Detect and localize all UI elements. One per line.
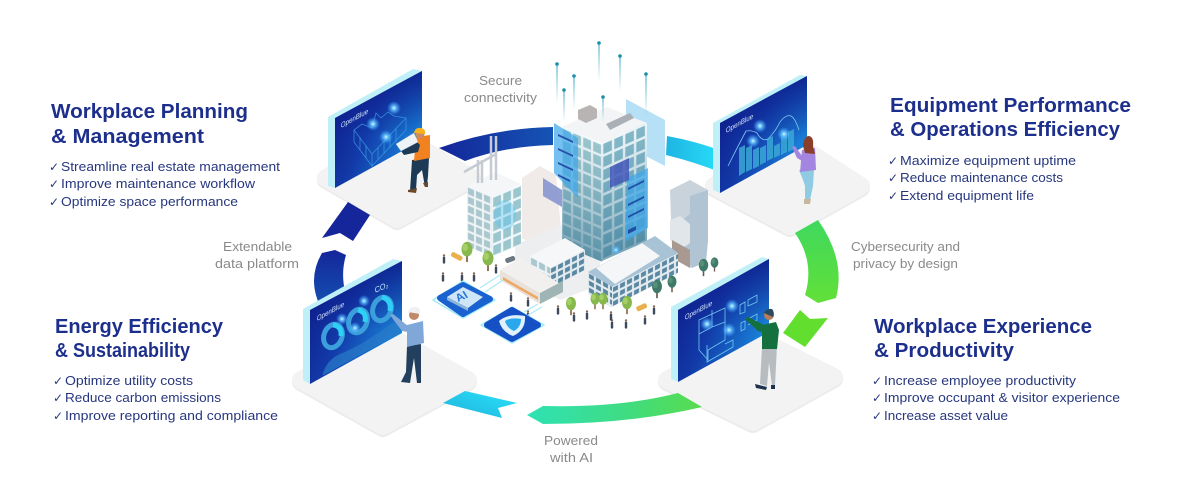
screen highlights xyxy=(746,119,791,148)
orange stripes xyxy=(503,277,538,300)
left face xyxy=(467,186,492,256)
donut charts xyxy=(320,295,395,350)
screen back glow xyxy=(713,75,807,193)
roof xyxy=(562,107,647,143)
label: extendable data platform: data platform xyxy=(215,256,299,271)
hard hat xyxy=(414,128,425,134)
bar chart xyxy=(739,129,794,176)
hair xyxy=(764,309,774,317)
right low glass building xyxy=(588,236,678,307)
legs xyxy=(799,170,814,200)
floating glass panel behind tower xyxy=(626,99,665,166)
platform: workplace experience xyxy=(667,335,834,424)
cars xyxy=(450,251,648,312)
pale background building xyxy=(522,166,562,250)
roof xyxy=(500,258,560,293)
tower light blocks xyxy=(670,216,690,250)
floor plan xyxy=(699,308,733,362)
roof unit xyxy=(578,105,597,123)
base glow xyxy=(611,245,621,255)
roof xyxy=(467,172,521,197)
text block: workplace planning xyxy=(49,101,280,209)
label: secure connectivity: Secure xyxy=(479,73,522,88)
left glass building xyxy=(464,136,521,257)
side block xyxy=(540,281,563,304)
screen xyxy=(335,71,422,188)
connector lines to chips xyxy=(480,275,542,315)
benefits list: Improve occupant & visitor experience xyxy=(884,390,1120,405)
trousers xyxy=(760,346,777,386)
icon: AI chip xyxy=(433,281,495,318)
benefits list: Optimize utility costs xyxy=(65,373,194,388)
ring arrow: green right arc xyxy=(795,220,839,303)
benefits list: Extend equipment life xyxy=(900,188,1034,203)
benefits list: Increase employee productivity xyxy=(884,373,1077,388)
label: cybersecurity and privacy by design xyxy=(851,239,960,271)
trees xyxy=(462,242,718,315)
shirt xyxy=(407,321,424,347)
roof light xyxy=(596,243,660,284)
text block: workplace experience xyxy=(872,316,1120,423)
person: man in green sweater xyxy=(745,309,779,390)
benefits list xyxy=(53,373,278,423)
benefits list: Reduce carbon emissions xyxy=(65,390,222,405)
benefits list xyxy=(49,159,280,209)
antennas xyxy=(556,43,646,122)
tower shade xyxy=(676,190,708,268)
illustration: central smart building campus xyxy=(433,41,718,343)
benefits list: ✓ xyxy=(888,189,898,203)
benefits list: Increase asset value xyxy=(884,408,1008,423)
facade xyxy=(500,270,540,304)
ring arrow: navy top segment xyxy=(439,127,553,161)
screen back glow xyxy=(303,259,402,384)
benefits list: ✓ xyxy=(872,391,882,405)
heading: & Management xyxy=(51,126,204,148)
heading: Equipment Performance xyxy=(890,95,1131,117)
benefits list: ✓ xyxy=(49,160,59,174)
arm xyxy=(390,314,408,332)
benefits list: Improve maintenance workflow xyxy=(61,176,256,191)
ring arrow: cyan bottom head xyxy=(443,391,517,418)
left face xyxy=(562,127,602,262)
label: cybersecurity and privacy by design: privacy by design xyxy=(853,256,958,271)
heading xyxy=(51,101,248,148)
shoes xyxy=(804,199,811,204)
benefits list: ✓ xyxy=(53,374,63,388)
heading xyxy=(874,316,1092,362)
tower block grey xyxy=(670,180,708,268)
screen dark overlay xyxy=(678,259,769,382)
boots xyxy=(408,182,428,193)
panel: energy efficiency screen and person xyxy=(303,259,424,384)
benefits list: Optimize space performance xyxy=(61,194,238,209)
people on plaza xyxy=(442,254,655,329)
benefits list: ✓ xyxy=(888,171,898,185)
benefits list xyxy=(872,373,1120,423)
heading: Workplace Planning xyxy=(51,101,248,123)
screen logo: OpenBlue xyxy=(685,300,713,322)
antenna nodes xyxy=(555,41,648,99)
benefits list: ✓ xyxy=(53,409,63,423)
orange vest xyxy=(414,135,430,161)
text block: equipment performance xyxy=(888,95,1131,203)
benefits list: ✓ xyxy=(53,391,63,405)
platform: energy efficiency xyxy=(301,334,468,428)
panel: equipment performance screen and person xyxy=(713,75,816,204)
person: man in cap xyxy=(390,307,424,383)
heading: & Sustainability xyxy=(55,340,191,362)
left overlay bars xyxy=(558,134,573,182)
screen back glow xyxy=(671,257,769,382)
right facade xyxy=(612,253,678,307)
icon: security shield chip xyxy=(481,307,544,343)
pale ground block between buildings xyxy=(515,225,600,300)
chip body xyxy=(447,287,483,308)
legs xyxy=(401,344,421,383)
label: cybersecurity and privacy by design: Cybersecurity and xyxy=(851,239,960,254)
right face xyxy=(492,185,521,257)
purple data panel xyxy=(610,158,629,188)
roof vent xyxy=(606,113,634,130)
shoes xyxy=(755,384,775,390)
label: extendable data platform: Extendable xyxy=(223,239,292,254)
chart marks xyxy=(740,295,757,331)
heading xyxy=(890,95,1131,141)
screen back glow xyxy=(328,69,422,188)
benefits list: ✓ xyxy=(872,374,882,388)
middle white building xyxy=(530,238,585,288)
person: engineer with plans xyxy=(396,128,430,193)
world map shape xyxy=(322,318,400,377)
shield xyxy=(499,315,525,336)
arm xyxy=(792,146,802,161)
panel: workplace planning screen and person xyxy=(328,69,430,193)
heading: Energy Efficiency xyxy=(55,316,224,338)
screen highlights xyxy=(700,299,739,337)
label: secure connectivity xyxy=(464,73,538,105)
sweater xyxy=(762,322,779,349)
screen highlights xyxy=(336,295,370,334)
low white building with orange awning xyxy=(500,258,563,304)
platform: workplace planning xyxy=(326,137,472,221)
screen logo: OpenBlue xyxy=(341,108,369,130)
line chart xyxy=(728,116,799,166)
outer outline xyxy=(481,307,544,343)
chip label: AI xyxy=(453,290,470,304)
roof xyxy=(530,238,585,268)
head xyxy=(416,130,424,138)
benefits list: ✓ xyxy=(49,195,59,209)
ring arrow: green arrow head xyxy=(783,310,828,347)
co2 label: CO₂ xyxy=(374,280,389,295)
person: woman at screen xyxy=(792,136,816,204)
roof outer xyxy=(588,236,678,287)
screen dark overlay xyxy=(335,71,422,188)
right data overlay xyxy=(625,168,648,242)
heading: & Productivity xyxy=(874,340,1015,362)
benefits list: ✓ xyxy=(49,177,59,191)
crane xyxy=(464,136,496,183)
left data overlay xyxy=(554,123,578,198)
label: extendable data platform xyxy=(215,239,299,271)
screen logo: OpenBlue xyxy=(726,113,754,135)
benefits list xyxy=(888,153,1076,203)
benefits list: ✓ xyxy=(872,409,882,423)
benefits list: ✓ xyxy=(888,154,898,168)
tower brown base xyxy=(672,240,690,268)
chip outer outline xyxy=(433,281,495,318)
right face xyxy=(550,250,585,288)
screen xyxy=(720,76,807,193)
benefits list: Improve reporting and compliance xyxy=(65,408,278,423)
ring arrow: navy left arc xyxy=(314,250,352,310)
glow xyxy=(494,200,516,230)
heading: & Operations Efficiency xyxy=(890,119,1121,141)
ring arrow: navy upper left head xyxy=(322,202,370,241)
text block: energy efficiency xyxy=(53,316,278,423)
right overlay bars xyxy=(628,180,644,234)
head xyxy=(764,310,774,320)
base xyxy=(487,310,538,339)
arm xyxy=(745,317,765,333)
benefits list: Reduce maintenance costs xyxy=(900,170,1064,185)
benefits list: Maximize equipment uptime xyxy=(900,153,1076,168)
chip base xyxy=(440,285,490,314)
left face xyxy=(530,256,550,284)
right face xyxy=(602,123,647,261)
panel: workplace experience screen and person xyxy=(671,257,779,390)
main tower xyxy=(554,105,648,262)
hair xyxy=(803,136,815,154)
blueprint xyxy=(396,133,418,151)
screen dark overlay xyxy=(720,76,807,193)
legs xyxy=(410,158,429,191)
label: powered with AI xyxy=(544,433,598,465)
label: secure connectivity: connectivity xyxy=(464,90,538,105)
small floating panel xyxy=(543,178,562,207)
platform: equipment performance xyxy=(714,140,861,228)
screen highlights xyxy=(366,101,401,144)
screen logo: OpenBlue xyxy=(317,301,345,323)
screen xyxy=(310,261,402,384)
heading: Workplace Experience xyxy=(874,316,1092,338)
screen dark overlay xyxy=(310,261,402,384)
screen xyxy=(678,259,769,382)
left facade xyxy=(588,272,612,307)
chip front xyxy=(447,297,468,311)
shield center xyxy=(505,318,521,331)
ring arrow: cyan top right segment xyxy=(666,136,722,173)
label: powered with AI: with AI xyxy=(549,450,593,465)
ring arrow: green bottom arc xyxy=(527,393,702,424)
cap xyxy=(408,307,420,314)
label: powered with AI: Powered xyxy=(544,433,598,448)
head xyxy=(409,310,419,320)
heading xyxy=(55,316,224,362)
abstract background tower xyxy=(670,180,708,268)
sweater xyxy=(800,148,816,172)
screen building wireframe xyxy=(354,112,406,166)
benefits list: Streamline real estate management xyxy=(61,159,280,174)
arm xyxy=(401,141,420,155)
